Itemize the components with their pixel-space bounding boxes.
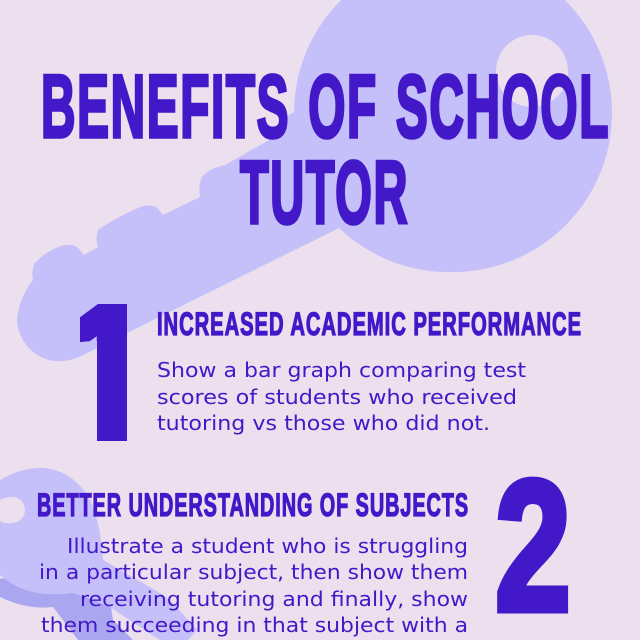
- small key body: [0, 468, 197, 640]
- title: [41, 56, 610, 242]
- body text 1: Show a bar graph comparing test: [157, 358, 526, 382]
- title line 2: TUTOR: [240, 142, 409, 242]
- body text 1: [157, 358, 526, 435]
- body text 2: them succeeding in that subject with a: [41, 613, 468, 637]
- icon: large key: [17, 0, 612, 361]
- small key shadow: [0, 570, 133, 640]
- body text 2: [39, 534, 468, 637]
- body text 1: scores of students who received: [157, 385, 517, 409]
- body text 2: in a particular subject, then show them: [39, 560, 468, 584]
- section 2: [37, 443, 571, 640]
- section 1: [60, 264, 582, 483]
- number 1: 1: [60, 264, 156, 483]
- icon: small key: [0, 468, 197, 640]
- body text 2: Illustrate a student who is struggling: [67, 534, 468, 558]
- body text 2: receiving tutoring and finally, show: [80, 587, 468, 611]
- body text 1: tutoring vs those who did not.: [157, 411, 490, 435]
